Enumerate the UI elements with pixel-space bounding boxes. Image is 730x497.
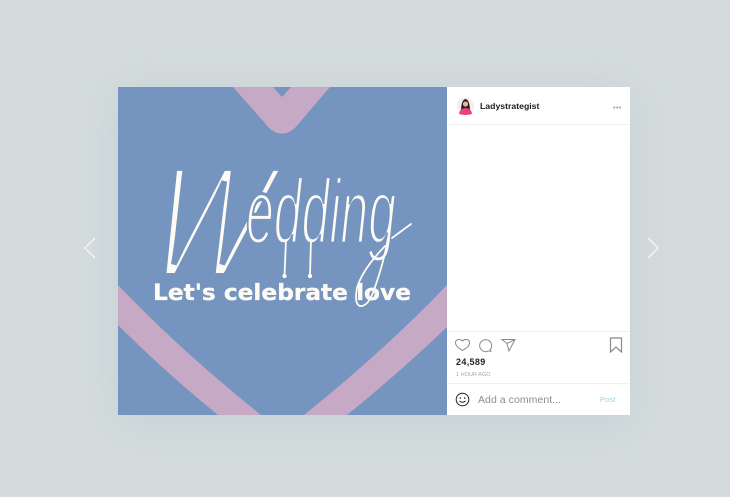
- heart right stroke: [304, 285, 447, 415]
- divider: [447, 331, 630, 332]
- arrow: previous: [84, 238, 96, 258]
- username: Ladystrategist: [480, 101, 539, 111]
- script title: W: [139, 133, 290, 312]
- divider: [447, 383, 630, 384]
- divider: [447, 124, 630, 125]
- script flourishes: [283, 224, 411, 306]
- like count: 24,589: [456, 357, 486, 367]
- post button: Post: [600, 395, 615, 404]
- more options dots: [613, 106, 621, 108]
- subtitle: Let's celebrate love: [153, 281, 411, 306]
- icon: bookmark: [610, 337, 622, 353]
- icon: heart: [455, 339, 470, 351]
- comment placeholder: Add a comment...: [478, 394, 561, 406]
- icon: smiley: [456, 392, 470, 406]
- arrow: next: [648, 238, 658, 258]
- heart top point: [233, 87, 330, 134]
- icon: comment: [479, 339, 492, 352]
- panel: wedding post image: [118, 87, 447, 415]
- profile avatar: [457, 98, 474, 115]
- panel: instagram sidebar: [447, 87, 630, 415]
- card shadow: [118, 87, 630, 415]
- timestamp: 1 HOUR AGO: [456, 372, 491, 378]
- heart left stroke: [118, 285, 261, 415]
- icon: share: [501, 339, 516, 352]
